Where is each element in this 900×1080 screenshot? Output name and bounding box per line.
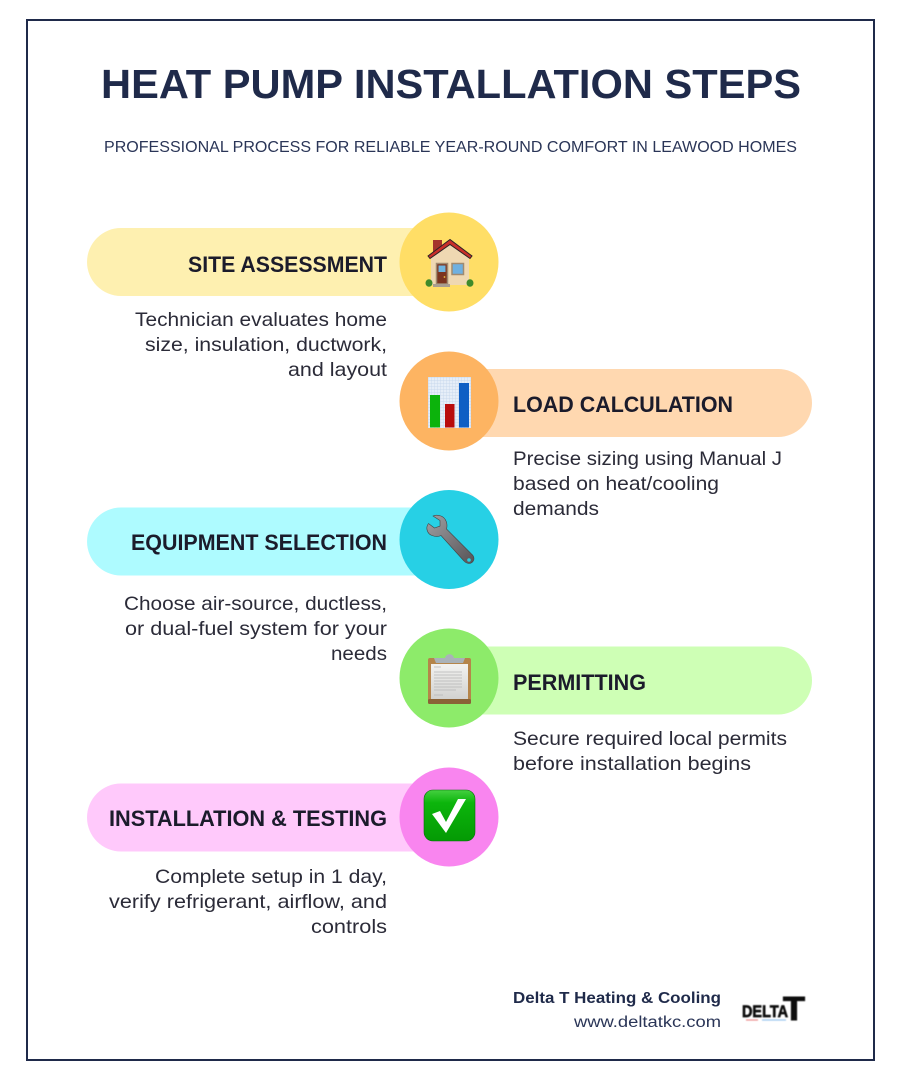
step 5 description: controls [311, 916, 387, 938]
step 5 description: verify refrigerant, airflow, and [109, 891, 387, 913]
step 3 description [124, 593, 388, 665]
logo: Delta T: DELTA [742, 1002, 788, 1021]
step 4 circle [400, 628, 498, 728]
step 5 description [109, 866, 387, 938]
step 2 description: Precise sizing using Manual J [513, 448, 782, 470]
step 1 circle [400, 212, 498, 312]
step 4 description: before installation begins [513, 753, 751, 775]
logo: Delta T [742, 990, 805, 1027]
panel: step 2 load calculation [400, 352, 812, 520]
step 2 circle [400, 352, 498, 450]
title: HEAT PUMP INSTALLATION STEPS [101, 61, 801, 107]
step 5 description: Complete setup in 1 day, [155, 866, 387, 888]
icon: check mark [424, 790, 475, 841]
step 3 circle [400, 490, 498, 589]
panel: step 4 permitting [400, 628, 812, 775]
step 1 description: Technician evaluates home [135, 309, 387, 331]
icon: house [426, 240, 474, 287]
logo: Delta T: T [783, 990, 805, 1027]
step 2 description: demands [513, 498, 599, 520]
step 4 heading: PERMITTING [513, 670, 646, 695]
step 2 heading: LOAD CALCULATION [513, 392, 733, 417]
step 1 description: size, insulation, ductwork, [145, 334, 387, 356]
step 2 pill [449, 369, 812, 437]
icon: clipboard [428, 654, 471, 704]
footer company name: Delta T Heating & Cooling [513, 990, 721, 1007]
panel: step 3 equipment selection [87, 490, 498, 665]
footer website: www.deltatkc.com [573, 1014, 721, 1031]
icon: bar chart [428, 377, 471, 428]
step 4 pill [449, 646, 812, 714]
icon: wrench [427, 515, 474, 563]
step 5 heading: INSTALLATION & TESTING [109, 806, 387, 831]
step 1 heading: SITE ASSESSMENT [188, 252, 388, 277]
step 3 pill [87, 508, 449, 576]
subtitle: PROFESSIONAL PROCESS FOR RELIABLE YEAR-ROUND COMFORT IN LEAWOOD HOMES [104, 139, 797, 156]
step 2 description [513, 448, 782, 520]
panel: step 1 site assessment [87, 212, 499, 381]
panel: step 5 installation and testing [87, 768, 498, 938]
step 2 description: based on heat/cooling [513, 473, 719, 495]
step 1 pill [87, 228, 449, 296]
step 5 pill [87, 784, 449, 852]
step 1 description: and layout [288, 359, 388, 381]
step 5 circle [400, 768, 498, 866]
step 3 description: needs [331, 643, 387, 665]
step 3 heading: EQUIPMENT SELECTION [131, 530, 387, 555]
step 4 description [513, 728, 787, 775]
step 1 description [135, 309, 388, 381]
step 3 description: or dual-fuel system for your [125, 618, 388, 640]
step 3 description: Choose air-source, ductless, [124, 593, 387, 615]
step 4 description: Secure required local permits [513, 728, 787, 750]
